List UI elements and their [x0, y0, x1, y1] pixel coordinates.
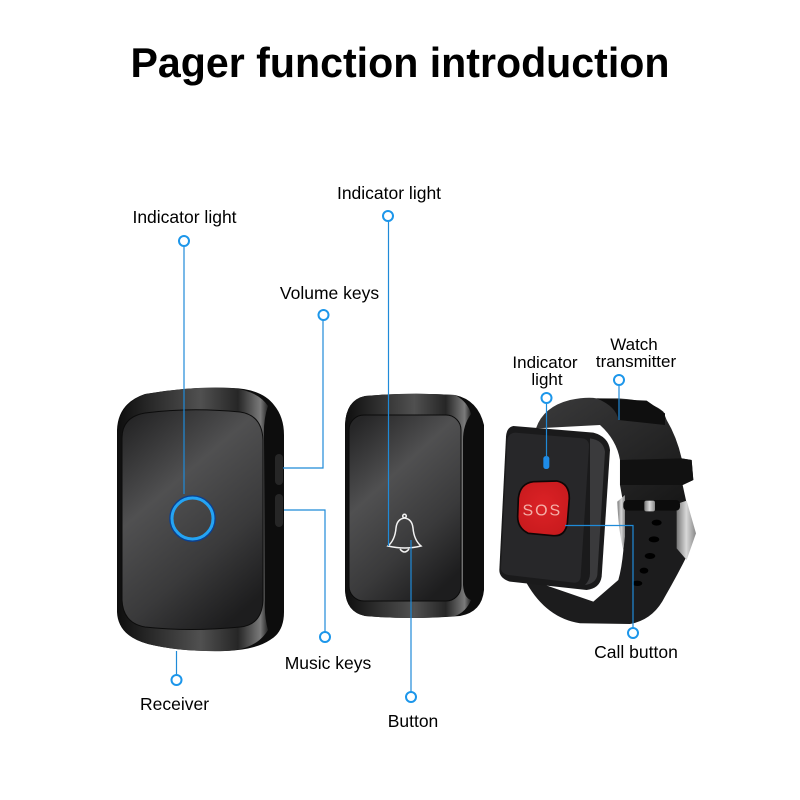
upper strap [536, 398, 693, 503]
strap keeper [620, 458, 693, 485]
watch face [501, 433, 589, 583]
volume key [275, 454, 283, 485]
buckle right plate [677, 501, 696, 560]
label: indicator light (receiver): Indicator light [132, 207, 237, 227]
callout: volume keys [283, 310, 328, 468]
buckle bar [623, 500, 680, 511]
label: receiver: Receiver [140, 694, 209, 714]
music key [275, 494, 283, 527]
doorbell body [345, 394, 484, 618]
label: volume keys: Volume keys [280, 283, 379, 303]
indicator light [543, 456, 549, 469]
callout: button [406, 540, 416, 702]
buckle left plate [617, 495, 625, 550]
doorbell bezel [345, 394, 471, 618]
label: indicator light (doorbell): Indicator light [337, 183, 441, 203]
doorbell device [345, 394, 484, 618]
callout: receiver indicator light [179, 236, 189, 494]
strap holes [632, 520, 662, 586]
callout: music keys [284, 510, 330, 642]
callout: call button [565, 526, 638, 638]
case side bevel [585, 438, 605, 585]
receiver body [117, 388, 284, 651]
callout: doorbell indicator light [383, 211, 393, 546]
lower strap [527, 510, 687, 624]
watch case [499, 426, 610, 590]
label: indicator light (watch): light [531, 370, 563, 389]
label: call button: Call button [594, 642, 678, 662]
title: Pager function introduction [130, 39, 670, 86]
receiver face [122, 410, 263, 630]
indicator ring [170, 496, 215, 541]
watch transmitter device [499, 398, 696, 624]
receiver bezel [118, 388, 268, 651]
receiver device [117, 388, 284, 651]
callout: watch indicator light [542, 393, 552, 458]
label: indicator light (watch): Indicator [512, 353, 578, 372]
label: watch transmitter: Watch [610, 335, 658, 354]
callout: receiver [172, 651, 182, 685]
buckle pin [644, 501, 655, 511]
label: watch transmitter: transmitter [596, 352, 676, 371]
SOS button [518, 481, 569, 536]
label: music keys: Music keys [285, 653, 372, 673]
label: button: Button [388, 711, 438, 731]
doorbell face [349, 415, 461, 601]
callout: watch transmitter [614, 375, 624, 420]
strap inner band [597, 398, 665, 425]
SOS label: SOS [522, 502, 562, 519]
icon: bell [388, 514, 421, 552]
